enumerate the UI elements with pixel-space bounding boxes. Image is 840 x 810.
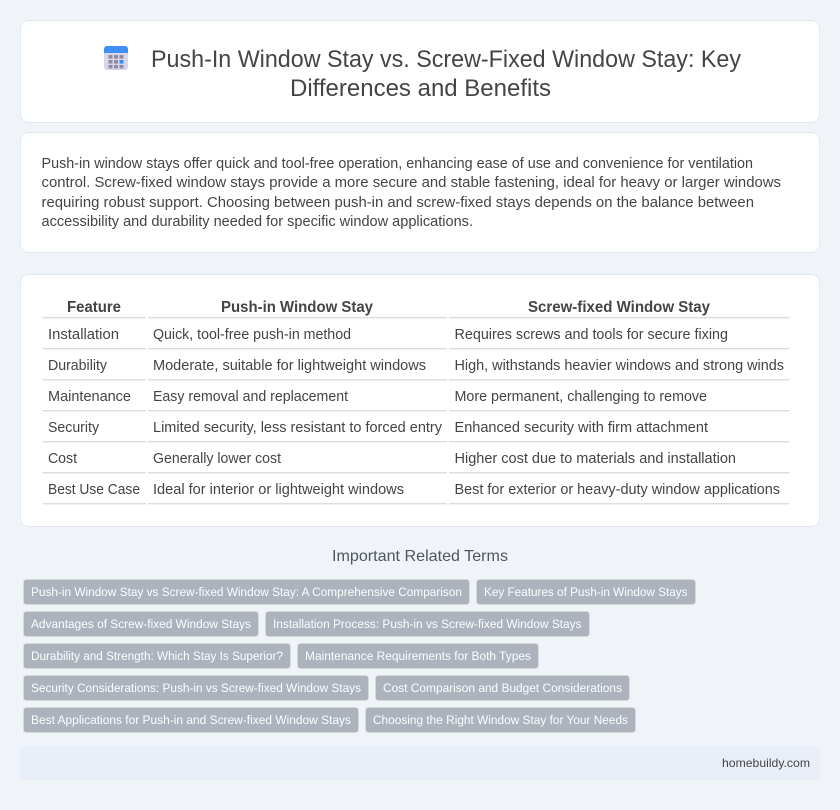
- tag: [298, 644, 538, 668]
- text block: introduction: Push-in window stays offer quick and tool-free operation, enhancing ease of use and convenience for ventilation: [42, 156, 753, 172]
- text block: introduction: control. Screw-fixed window stays provide a more secure and stable fastening, ideal for heavy or larger windows: [42, 175, 781, 191]
- table header row: Push-in Window Stay: [221, 299, 373, 316]
- table row: durability: [48, 358, 784, 374]
- table row: durability: Durability: [48, 358, 108, 374]
- tag: [24, 708, 358, 732]
- tag: Cost Comparison and Budget Considerations: [383, 681, 622, 695]
- table row: installation: Installation: [48, 327, 119, 343]
- title: Differences and Benefits: [290, 75, 551, 102]
- table row: cost: Generally lower cost: [153, 451, 281, 467]
- table row: security: Enhanced security with firm attachment: [454, 420, 708, 436]
- tag: [24, 612, 258, 636]
- footer: homebuildy.com: [722, 756, 810, 770]
- table row: security: Security: [48, 420, 100, 436]
- panel: introduction: [20, 132, 820, 252]
- table row: maintenance: Maintenance: [48, 389, 131, 405]
- title: Push-In Window Stay vs. Screw-Fixed Window Stay: Key: [151, 46, 742, 73]
- heading: related terms: Important Related Terms: [332, 548, 508, 565]
- table row: maintenance: More permanent, challenging to remove: [454, 389, 707, 405]
- tag: Choosing the Right Window Stay for Your Needs: [373, 713, 628, 727]
- table row: best use case: Ideal for interior or lightweight windows: [153, 482, 404, 498]
- text block: introduction: requiring robust support. Choosing between push-in and screw-fixed stays depends on the balance between: [42, 195, 754, 211]
- table row: durability: High, withstands heavier windows and strong winds: [454, 358, 784, 374]
- table header row: Feature: [67, 299, 121, 316]
- table header row: Screw-fixed Window Stay: [528, 299, 710, 316]
- panel: header: [20, 20, 820, 122]
- text block: introduction: accessibility and durability needed for specific window applications.: [42, 214, 473, 230]
- tag: Security Considerations: Push-in vs Screw-fixed Window Stays: [31, 681, 361, 695]
- table row: installation: Quick, tool-free push-in method: [153, 327, 351, 343]
- tag: [476, 580, 696, 604]
- tag: Installation Process: Push-in vs Screw-fixed Window Stays: [273, 617, 582, 631]
- table row: best use case: Best Use Case: [48, 482, 140, 498]
- footer: [20, 746, 820, 780]
- tag: Maintenance Requirements for Both Types: [305, 649, 531, 663]
- table row: maintenance: [48, 389, 707, 405]
- tag: [366, 708, 636, 732]
- icon: calendar: [104, 46, 128, 70]
- tag: [266, 612, 590, 636]
- table header row: [67, 299, 710, 316]
- tag: Push-in Window Stay vs Screw-fixed Window Stay: A Comprehensive Comparison: [31, 585, 462, 599]
- table row: cost: [48, 451, 736, 467]
- table row: security: Limited security, less resistant to forced entry: [153, 420, 443, 436]
- panel: comparison table: [20, 274, 820, 526]
- table row: installation: Requires screws and tools for secure fixing: [454, 327, 728, 343]
- table row: cost: Higher cost due to materials and installation: [454, 451, 736, 467]
- table row: cost: Cost: [48, 451, 77, 467]
- table row: security: [48, 420, 708, 436]
- related term tags: [24, 580, 696, 732]
- tag: [24, 644, 290, 668]
- table row: best use case: [48, 482, 780, 498]
- table row: maintenance: Easy removal and replacement: [153, 389, 348, 405]
- tag: [24, 676, 368, 700]
- tag: Best Applications for Push-in and Screw-fixed Window Stays: [31, 713, 351, 727]
- tag: [24, 580, 470, 604]
- table row: durability: Moderate, suitable for lightweight windows: [153, 358, 426, 374]
- tag: Advantages of Screw-fixed Window Stays: [31, 617, 251, 631]
- table row: installation: [48, 327, 728, 343]
- tag: [376, 676, 630, 700]
- tag: Key Features of Push-in Window Stays: [484, 585, 688, 599]
- text block: introduction: [42, 156, 781, 230]
- tag: Durability and Strength: Which Stay Is Superior?: [31, 649, 283, 663]
- table row: best use case: Best for exterior or heavy-duty window applications: [454, 482, 780, 498]
- title: [151, 46, 742, 102]
